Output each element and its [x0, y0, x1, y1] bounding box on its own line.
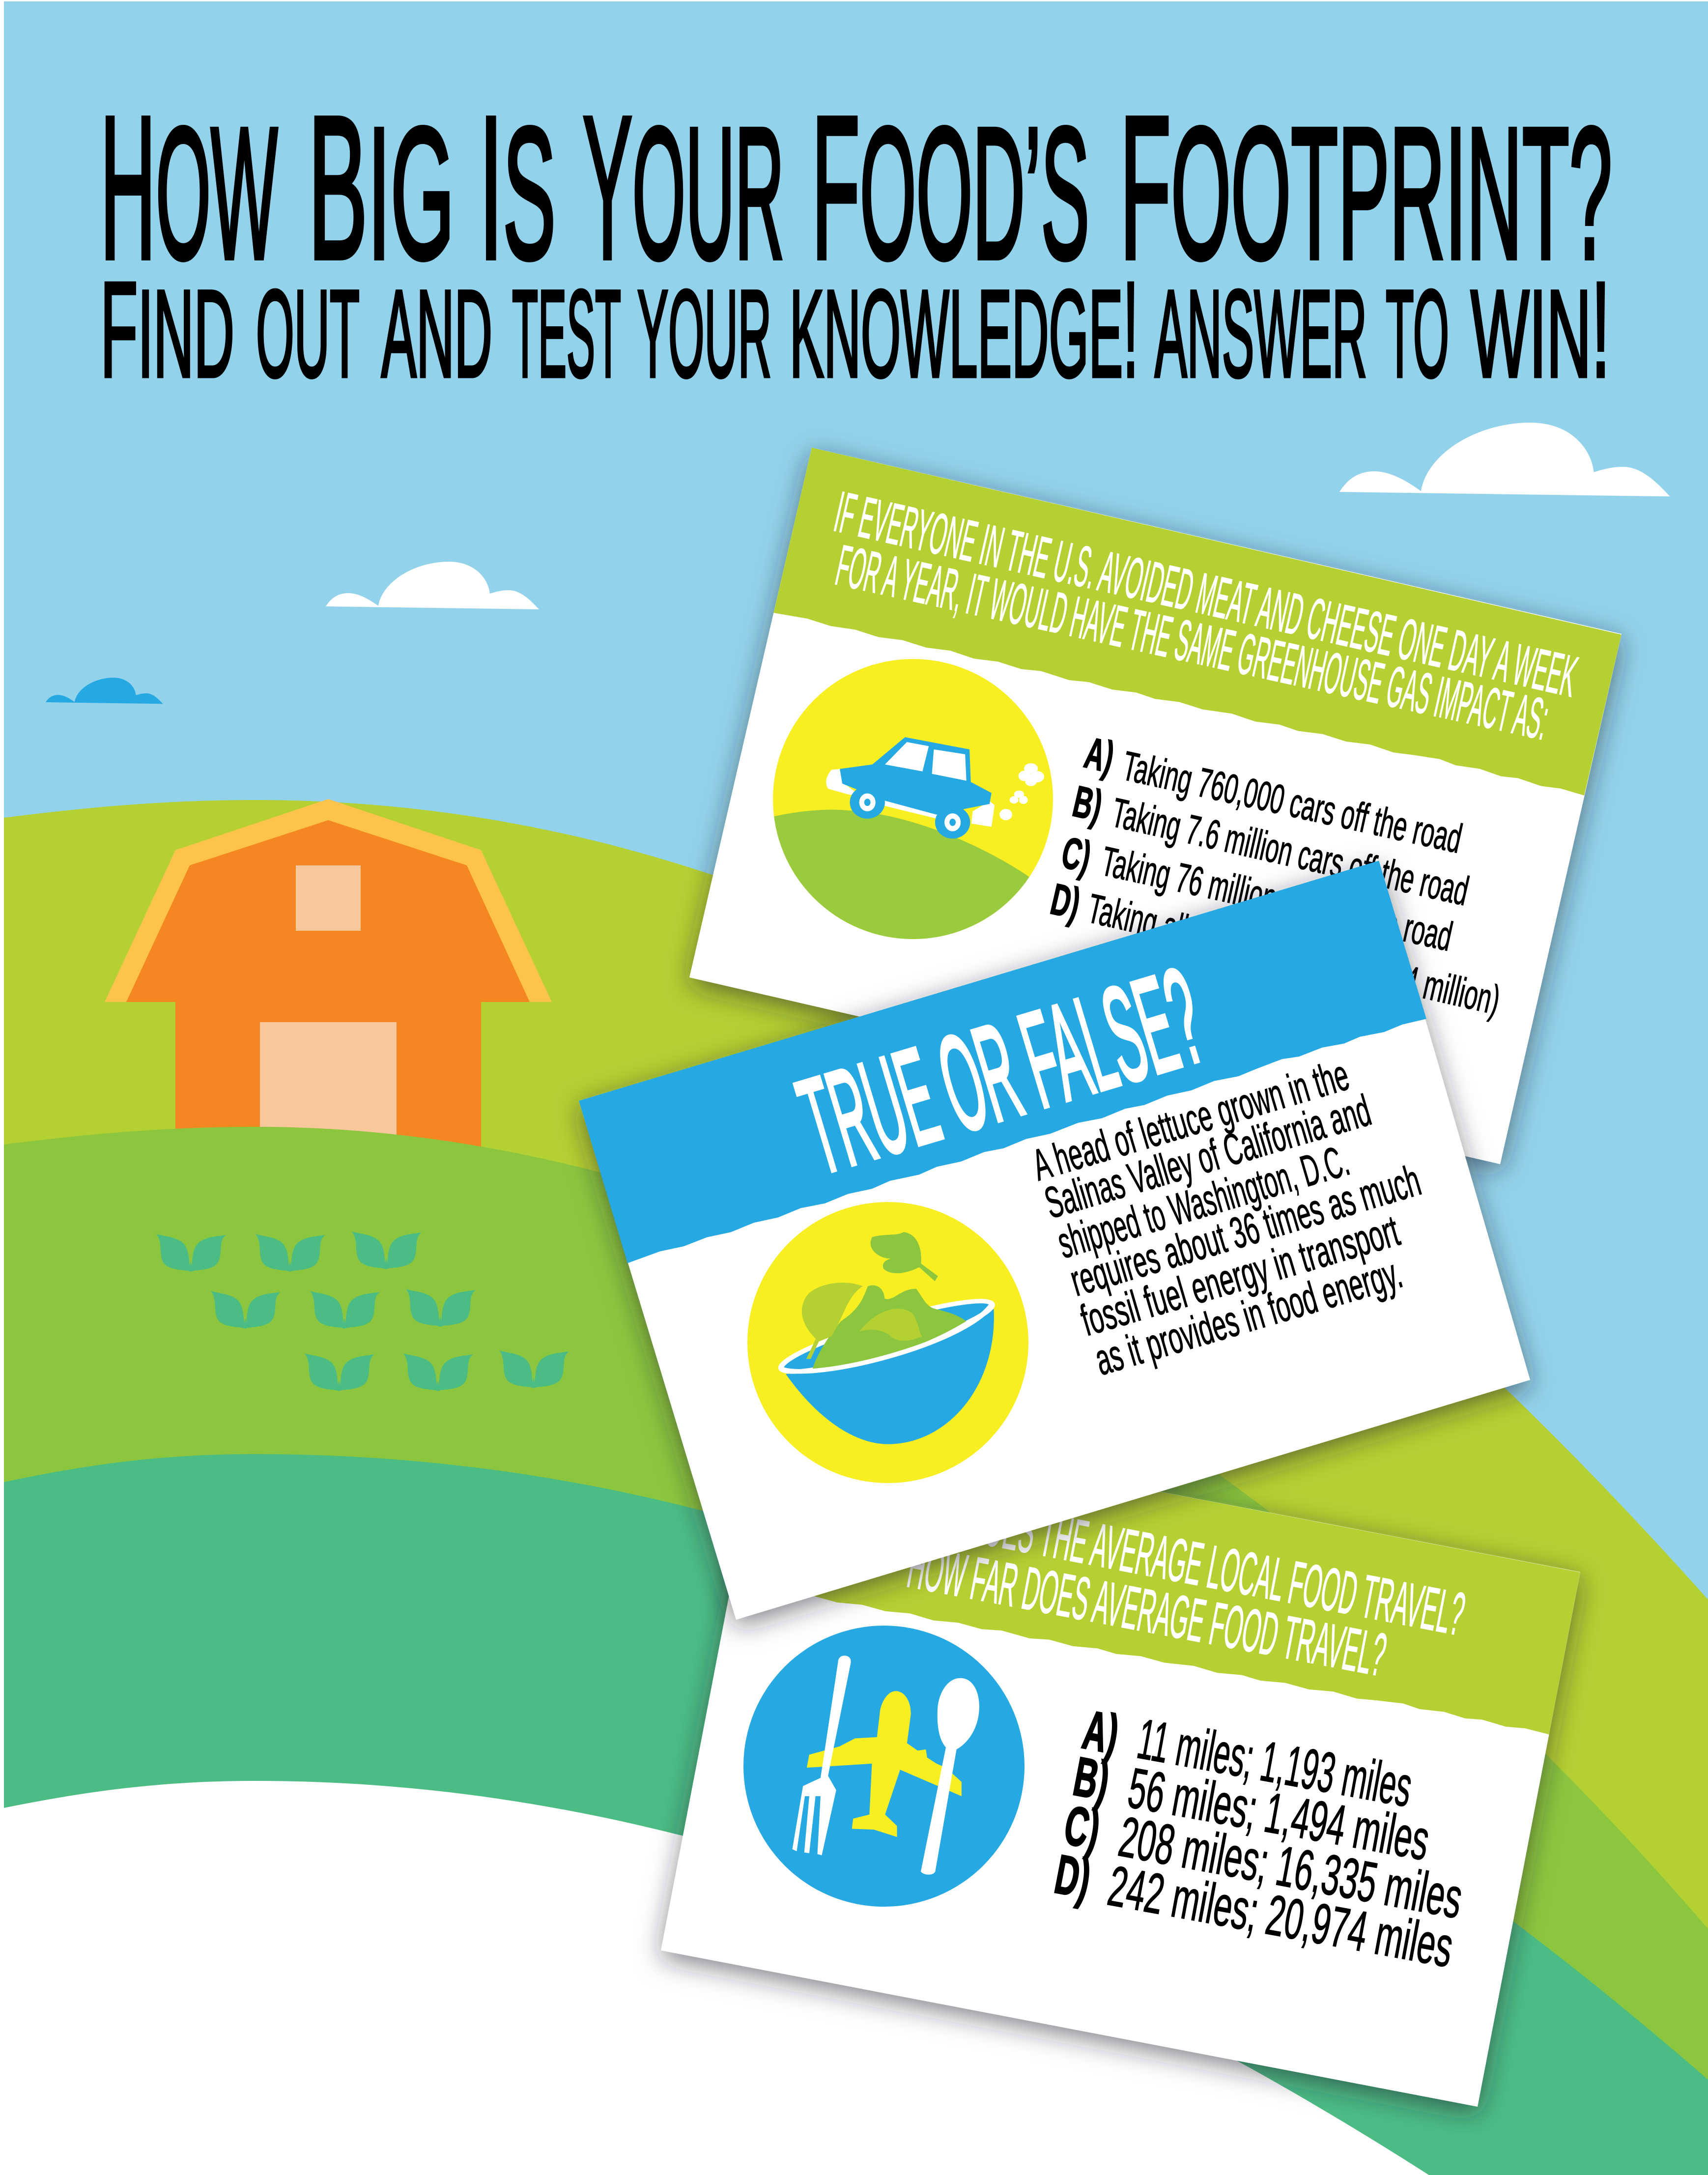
subtitle	[100, 254, 1610, 405]
title: FOOD’S	[812, 74, 1089, 301]
icon: plane fork spoon	[743, 1626, 1025, 1907]
subtitle: KNOWLEDGE!	[790, 254, 1139, 405]
card 1 answers: C)	[1057, 828, 1096, 882]
card 3 answers: C)	[1059, 1794, 1105, 1861]
panel: card 3 food miles	[661, 1416, 1580, 2107]
card 1 header band	[773, 448, 1622, 800]
subtitle: OUT	[256, 265, 360, 403]
icon: salad bowl	[747, 1202, 1028, 1483]
card 3 answers: 242 miles; 20,974 miles	[1103, 1854, 1458, 1979]
card 3 answers: 208 miles; 16,335 miles	[1114, 1804, 1467, 1930]
card 3 heading text	[849, 1465, 1470, 1689]
card 1 answers: Taking 760,000 cars off the road	[1118, 743, 1466, 862]
panel: card 2 true or false	[579, 860, 1530, 1620]
title: HOW	[100, 74, 278, 301]
card 2 body text: shipped to Washington, D.C.	[1052, 1136, 1355, 1268]
card 3 answers: B)	[1069, 1746, 1114, 1812]
card 1 answers: D)	[1047, 875, 1085, 929]
card 2 body text: fossil fuel energy in transport	[1076, 1206, 1405, 1345]
subtitle: AND	[381, 265, 492, 403]
title: YOUR	[583, 74, 784, 301]
card 2 header band	[579, 860, 1427, 1263]
seedlings	[156, 1231, 569, 1391]
subtitle: YOUR	[637, 265, 771, 403]
hill: back lime	[4, 800, 1708, 2175]
title	[100, 74, 1612, 301]
subtitle: TO	[1386, 265, 1449, 403]
card 2 body text: as it provides in food energy.	[1089, 1248, 1407, 1385]
card 2 body text	[1027, 1050, 1426, 1385]
card 2 body text: A head of lettuce grown in the	[1027, 1050, 1354, 1190]
title: IS	[479, 74, 556, 301]
barn window	[296, 865, 361, 931]
subtitle: ANSWER	[1155, 265, 1367, 403]
hill: foreground white	[4, 1781, 1429, 2175]
card 1 answers	[1047, 728, 1505, 1023]
card 2 body text: Salinas Valley of California and	[1039, 1086, 1376, 1228]
barn	[105, 799, 552, 1179]
card 1 answers: B)	[1069, 777, 1107, 831]
card 1 answers: Taking 76 million cars off the road	[1097, 838, 1456, 960]
barn door	[260, 1022, 397, 1160]
cloud: small blue	[46, 678, 163, 704]
title: BIG	[308, 74, 455, 301]
cloud: middle white	[326, 562, 539, 609]
icon: car on hill	[773, 659, 1053, 939]
card 3 answers	[1050, 1699, 1467, 1979]
card 3 answers: 56 miles; 1,494 miles	[1124, 1756, 1434, 1872]
card 3 header band	[732, 1416, 1580, 1739]
hill: mid green	[4, 1127, 1708, 2175]
cloud: large white	[1339, 423, 1670, 496]
card 1 heading text	[829, 480, 1583, 752]
panel: card 1 meat and cheese	[689, 448, 1622, 1164]
subtitle: WIN!	[1471, 254, 1610, 405]
subtitle: FIND	[100, 254, 234, 405]
hill: front teal	[4, 1454, 1708, 2175]
card 1 answers: A)	[1081, 728, 1119, 782]
card 3 answers: A)	[1078, 1699, 1124, 1766]
card 3 answers: D)	[1050, 1843, 1096, 1910]
card 3 answers: 11 miles; 1,193 miles	[1133, 1707, 1417, 1819]
card 2 body text: requires about 36 times as much	[1065, 1156, 1426, 1306]
subtitle: TEST	[512, 265, 621, 403]
